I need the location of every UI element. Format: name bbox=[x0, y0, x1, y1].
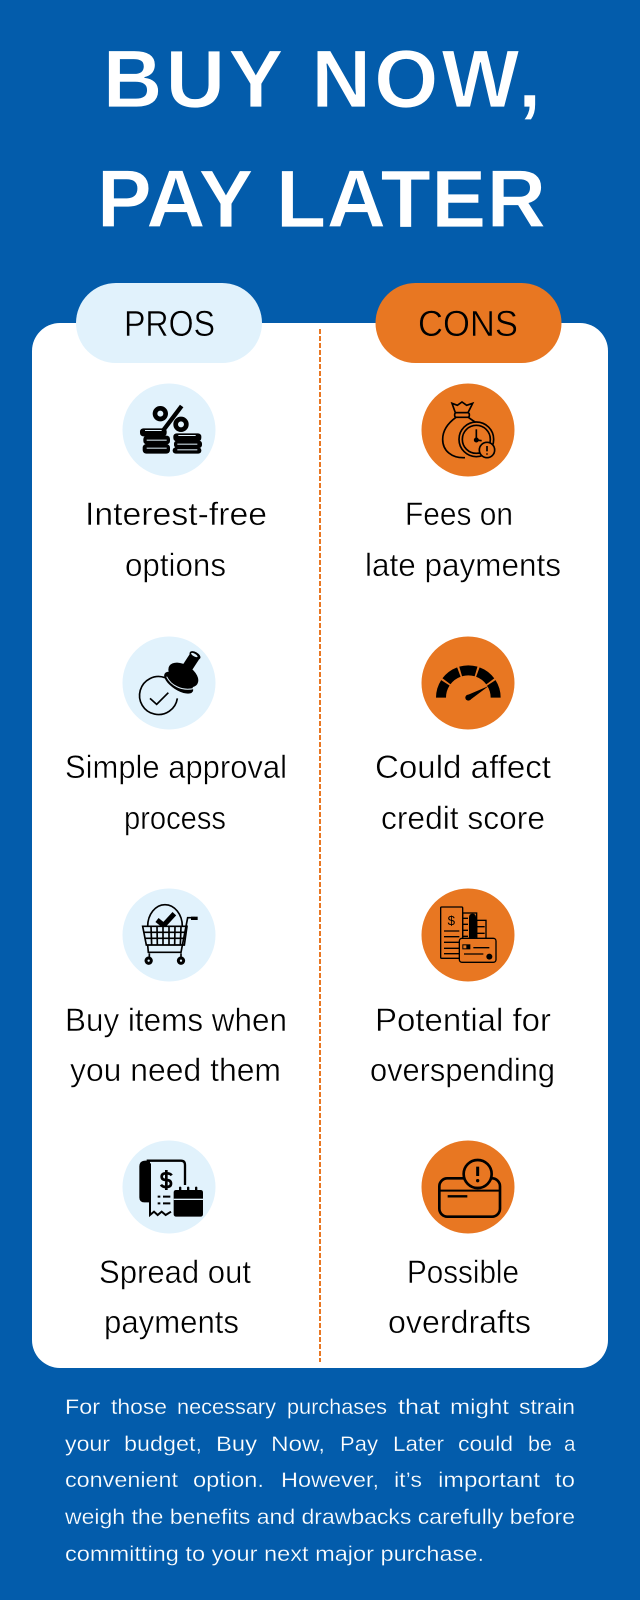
label: credit score bbox=[381, 800, 545, 836]
closing paragraph: might bbox=[450, 1396, 509, 1419]
closing paragraph: However, bbox=[281, 1469, 379, 1492]
pros heading bbox=[76, 283, 262, 363]
closing paragraph: Now, bbox=[271, 1433, 325, 1456]
icon: money bag, clock and alert bbox=[443, 402, 495, 458]
closing paragraph: convenient bbox=[65, 1469, 178, 1492]
icon: percent sign and coins bbox=[140, 406, 202, 454]
title bbox=[97, 34, 546, 245]
closing paragraph: be bbox=[528, 1433, 552, 1456]
label: Simple approval bbox=[65, 749, 287, 785]
pro item: buy items when you need them bbox=[65, 888, 287, 1088]
panel: pros and cons card bbox=[32, 323, 608, 1368]
label bbox=[370, 1002, 555, 1088]
label: process bbox=[124, 800, 226, 836]
closing paragraph: committing to your next major purchase. bbox=[65, 1543, 484, 1566]
label bbox=[85, 496, 267, 583]
closing paragraph: it’s bbox=[394, 1469, 422, 1492]
label: payments bbox=[104, 1304, 239, 1340]
closing paragraph: to bbox=[555, 1469, 575, 1492]
closing paragraph: that bbox=[398, 1396, 440, 1419]
label: Could affect bbox=[375, 749, 551, 785]
label: Possible bbox=[407, 1254, 519, 1290]
label: Interest-free bbox=[85, 496, 267, 532]
icon: stamp and check bbox=[140, 649, 203, 715]
pro item: simple approval process bbox=[65, 636, 287, 836]
con item: could affect credit score bbox=[375, 636, 551, 836]
pro item: spread out payments bbox=[99, 1140, 251, 1340]
closing paragraph: a bbox=[564, 1433, 576, 1456]
closing paragraph: could bbox=[458, 1433, 513, 1456]
title: PAY LATER bbox=[97, 154, 546, 245]
label: overspending bbox=[370, 1052, 555, 1088]
closing paragraph: For bbox=[65, 1396, 100, 1419]
closing paragraph bbox=[64, 1396, 576, 1566]
label: Buy items when bbox=[65, 1002, 287, 1038]
closing paragraph: purchases bbox=[287, 1396, 387, 1419]
label bbox=[365, 496, 561, 583]
icon: bills and credit card bbox=[441, 907, 496, 962]
closing paragraph: those bbox=[111, 1396, 167, 1419]
con item: potential for overspending bbox=[370, 888, 555, 1088]
icon: shopping cart with check bbox=[143, 905, 198, 963]
pros heading: PROS bbox=[124, 303, 215, 344]
closing paragraph: strain bbox=[519, 1396, 575, 1419]
con item: fees on late payments bbox=[365, 384, 561, 583]
icon: receipt and calendar bbox=[139, 1161, 203, 1217]
label: Potential for bbox=[375, 1002, 551, 1038]
closing paragraph: your bbox=[65, 1433, 110, 1456]
label bbox=[65, 1002, 287, 1088]
cons heading bbox=[376, 283, 562, 363]
label: Spread out bbox=[99, 1254, 251, 1290]
closing paragraph: option. bbox=[193, 1469, 264, 1492]
title: BUY NOW, bbox=[103, 34, 541, 125]
closing paragraph: necessary bbox=[177, 1396, 277, 1419]
label: options bbox=[125, 547, 226, 583]
label: Fees on bbox=[405, 496, 513, 532]
label bbox=[99, 1254, 251, 1340]
closing paragraph: Later bbox=[393, 1433, 444, 1456]
closing paragraph: Buy bbox=[216, 1433, 258, 1456]
cons heading: CONS bbox=[418, 303, 518, 344]
label bbox=[65, 749, 287, 836]
label: overdrafts bbox=[388, 1304, 531, 1340]
closing paragraph: important bbox=[438, 1469, 540, 1492]
label: late payments bbox=[365, 547, 561, 583]
label: you need them bbox=[70, 1052, 281, 1088]
closing paragraph: budget, bbox=[124, 1433, 202, 1456]
pro item: interest-free options bbox=[85, 384, 267, 583]
closing paragraph: weigh the benefits and drawbacks carefully before bbox=[64, 1506, 575, 1529]
con item: possible overdrafts bbox=[388, 1140, 531, 1340]
label bbox=[375, 749, 551, 836]
label bbox=[388, 1254, 531, 1340]
icon: card with alert bbox=[439, 1160, 500, 1217]
closing paragraph: Pay bbox=[340, 1433, 379, 1456]
icon: bills and credit card: $ bbox=[448, 913, 456, 928]
icon: gauge bbox=[441, 670, 496, 701]
